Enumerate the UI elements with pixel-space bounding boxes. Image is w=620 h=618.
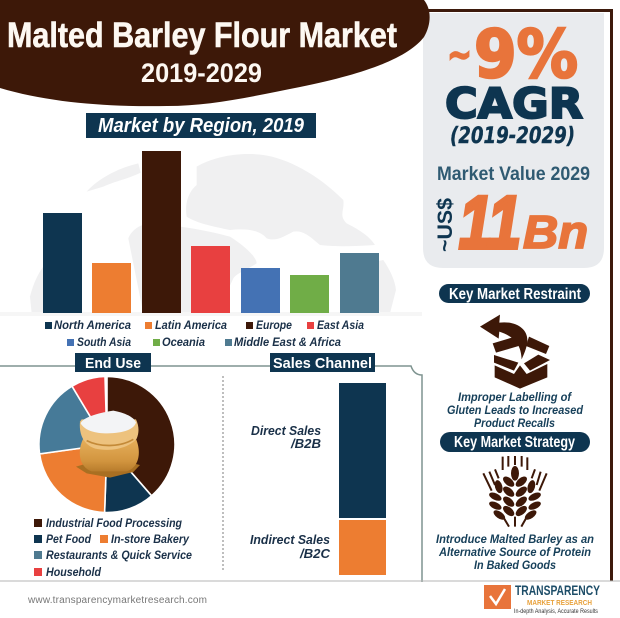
- heading: end use: End Use: [85, 355, 141, 372]
- legend: end use: Restaurants & Quick Service: [46, 548, 192, 562]
- stat: CAGR: [445, 16, 583, 149]
- pill: key market strategy: [440, 432, 590, 452]
- legend: regions: Middle East & Africa: [234, 335, 341, 349]
- stat: market value: [434, 164, 590, 264]
- stat: market value: Market Value 2029: [437, 164, 590, 185]
- logo: transparency market research: [484, 582, 600, 615]
- legend: regions: Latin America: [155, 318, 227, 332]
- stacked bar: sales channel: [339, 383, 386, 575]
- label: indirect sales: Indirect Sales: [250, 532, 330, 547]
- label: direct sales: [251, 423, 321, 451]
- stat: CAGR: 9%: [474, 16, 578, 93]
- website url: www.transparencymarketresearch.com: [27, 595, 207, 606]
- label: indirect sales: [250, 532, 331, 561]
- legend: end use: Household: [46, 565, 102, 579]
- heading: sales channel: Sales Channel: [273, 355, 372, 372]
- heading: market by region: Market by Region, 2019: [98, 115, 305, 137]
- logo mark: [484, 585, 511, 609]
- icon: box with return arrow: [480, 315, 550, 389]
- legend: end use: [34, 516, 192, 579]
- icon: flour sack: [76, 411, 140, 478]
- legend: regions: [45, 318, 364, 349]
- title: Malted Barley Flour Market: [7, 16, 397, 55]
- legend: regions: Oceania: [162, 335, 205, 349]
- text: strategy description: Introduce Malted Barley as an: [436, 532, 594, 546]
- text: restraint description: [447, 390, 584, 430]
- legend: regions: Europe: [256, 318, 292, 332]
- text: strategy description: [436, 532, 594, 572]
- stat: market value: 11: [459, 181, 521, 264]
- label: direct sales: /B2B: [290, 436, 321, 451]
- label: indirect sales: /B2C: [299, 546, 331, 561]
- stat: market value: Bn: [523, 206, 588, 258]
- stat: CAGR: ~: [447, 32, 472, 78]
- legend: end use: Industrial Food Processing: [46, 516, 183, 530]
- stat: CAGR: CAGR: [445, 79, 583, 128]
- stat: CAGR: (2019-2029): [450, 124, 575, 149]
- background globe map: [30, 154, 396, 313]
- legend: end use: In-store Bakery: [111, 532, 190, 546]
- text: strategy description: In Baked Goods: [474, 558, 556, 572]
- pie chart: end use: [39, 376, 175, 513]
- right stat panel background: [423, 10, 612, 581]
- legend: regions: North America: [54, 318, 131, 332]
- logo: transparency market research: MARKET RESEARCH: [527, 600, 592, 607]
- bar chart: market by region: [0, 151, 422, 316]
- subtitle years: 2019-2029: [141, 58, 262, 88]
- title banner: [0, 0, 430, 106]
- lower panel frame: [0, 366, 620, 582]
- legend: end use: Pet Food: [46, 532, 92, 546]
- label: direct sales: Direct Sales: [251, 423, 321, 438]
- text: restraint description: Improper Labelling of: [458, 390, 572, 404]
- text: restraint description: Gluten Leads to Increased: [447, 403, 584, 417]
- legend: regions: East Asia: [317, 318, 364, 332]
- stat: market value: ~US$: [434, 198, 457, 252]
- text: restraint description: Product Recalls: [474, 416, 555, 430]
- logo: transparency market research: In-depth Analysis, Accurate Results: [514, 609, 598, 615]
- legend: regions: South Asia: [77, 335, 131, 349]
- icon: wheat: [483, 456, 547, 527]
- text: strategy description: Alternative Source of Protein: [438, 545, 591, 559]
- pill: key market strategy: Key Market Strategy: [454, 434, 575, 451]
- pill: key market restraint: Key Market Restraint: [449, 286, 582, 303]
